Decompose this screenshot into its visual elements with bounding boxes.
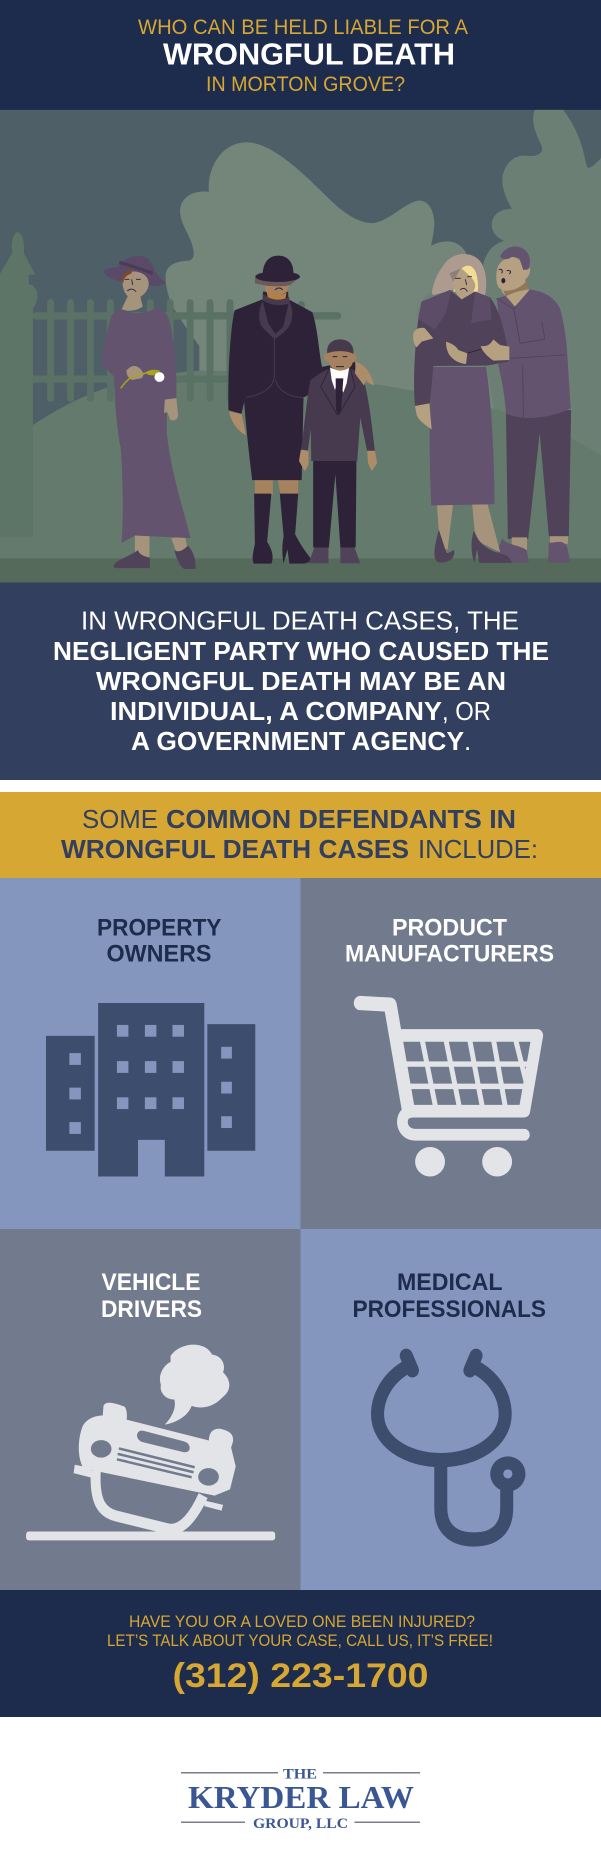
panel: common defendants heading: SOME [82, 804, 158, 834]
panel: negligent party statement: IN WRONGFUL DEATH CASES, THE [81, 606, 519, 636]
panel: call to action [0, 1590, 601, 1717]
panel: negligent party statement [0, 582, 601, 780]
panel: medical professionals [300, 1229, 601, 1590]
panel: vehicle drivers [0, 1229, 300, 1590]
panel: property owners: PROPERTY [97, 914, 222, 942]
panel: medical professionals: MEDICAL [397, 1269, 502, 1296]
logo: The Kryder Law Group [181, 1766, 420, 1832]
panel: negligent party statement: WRONGFUL DEATH MAY BE AN [96, 666, 506, 696]
panel: product manufacturers: MANUFACTURERS [345, 940, 554, 968]
panel: common defendants heading: WRONGFUL DEATH CASES [61, 834, 409, 864]
logo: The Kryder Law Group: THE [283, 1766, 317, 1782]
logo: The Kryder Law Group: KRYDER LAW [188, 1779, 414, 1815]
fence post [0, 232, 37, 537]
panel: negligent party statement: A GOVERNMENT AGENCY [131, 726, 464, 756]
figure: woman in black with veil [228, 256, 356, 564]
icon: stethoscope [378, 1356, 525, 1539]
figure: man comforting [496, 246, 571, 563]
panel: negligent party statement: , OR [442, 696, 491, 726]
fence [33, 299, 341, 402]
title: IN MORTON GROVE? [206, 73, 405, 96]
middle tree [166, 142, 498, 433]
hill [0, 371, 601, 564]
panel: negligent party statement: INDIVIDUAL, A COMPANY [110, 696, 442, 726]
panel: header [0, 0, 601, 110]
panel: property owners [0, 878, 300, 1229]
panel: negligent party statement: . [464, 726, 471, 756]
figure: boy in suit [299, 339, 377, 563]
panel: negligent party statement: NEGLIGENT PARTY WHO CAUSED THE [53, 636, 549, 666]
panel: product manufacturers [300, 878, 601, 1229]
panel: vehicle drivers: VEHICLE [102, 1269, 200, 1296]
panel: property owners: OWNERS [106, 940, 212, 968]
title: WHO CAN BE HELD LIABLE FOR A [138, 16, 468, 39]
panel: call to action: HAVE YOU OR A LOVED ONE BEEN INJURED? [129, 1612, 475, 1631]
right tree [460, 110, 601, 470]
figure: hand on boy's shoulder [355, 362, 374, 386]
title: WRONGFUL DEATH [163, 36, 455, 72]
panel: common defendants heading [0, 792, 601, 878]
ground [0, 558, 601, 583]
figure: elderly woman [413, 254, 512, 563]
icon: overturned car with smoke [26, 1345, 275, 1540]
panel: common defendants heading: INCLUDE: [418, 834, 538, 864]
panel: medical professionals: PROFESSIONALS [352, 1296, 546, 1323]
phone number: (312) 223-1700 [172, 1657, 428, 1695]
panel: vehicle drivers: DRIVERS [101, 1296, 202, 1323]
icon: shopping cart [360, 1003, 537, 1176]
panel: product manufacturers: PRODUCT [392, 914, 507, 942]
illustration: mourning family at cemetery [0, 110, 601, 583]
panel: call to action: LET’S TALK ABOUT YOUR CASE, CALL US, IT’S FREE! [107, 1631, 493, 1650]
icon: office buildings [46, 1003, 255, 1176]
figure: man's hand [481, 339, 509, 361]
figure: woman with hat and flower [101, 256, 196, 569]
title [138, 16, 468, 96]
panel: common defendants heading: COMMON DEFENDANTS IN [166, 804, 516, 834]
logo: The Kryder Law Group: GROUP, LLC [253, 1816, 348, 1832]
